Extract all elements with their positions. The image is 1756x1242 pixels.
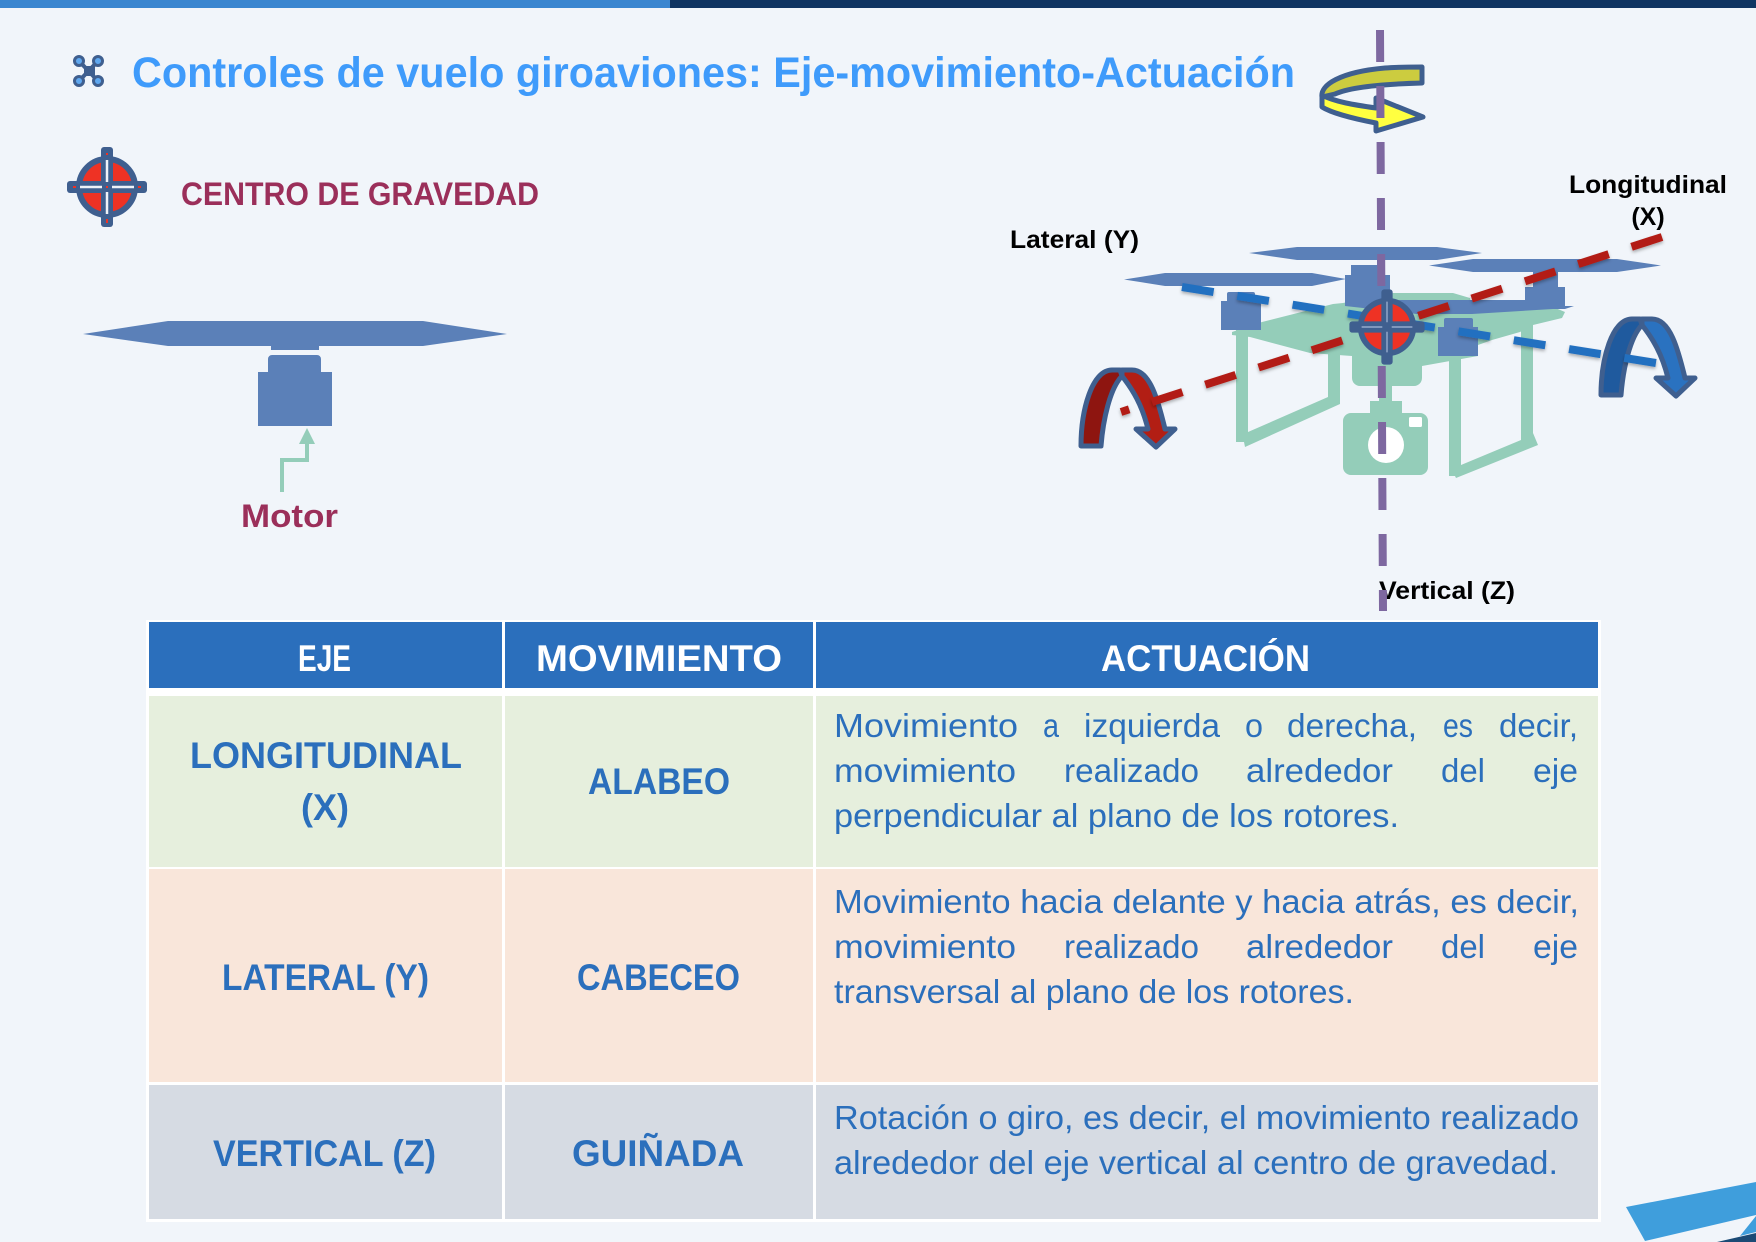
table header <box>149 622 1598 688</box>
icon: centro de gravedad <box>67 147 147 227</box>
yaw arrow <box>1322 67 1423 131</box>
row: longitudinal: Movimiento <box>834 707 1018 744</box>
drone body <box>1232 293 1565 475</box>
label: vertical: Vertical (Z) <box>1379 577 1515 605</box>
row: longitudinal <box>149 696 1598 867</box>
pitch arrow: blue <box>1601 319 1695 396</box>
motor body <box>258 355 332 426</box>
table header: MOVIMIENTO <box>536 638 782 679</box>
label: longitudinal: Longitudinal <box>1569 171 1727 199</box>
table header: ACTUACIÓN <box>1101 637 1310 679</box>
camera lens <box>1368 427 1404 463</box>
title: Controles de vuelo giroaviones: Eje-movimiento-Actuación <box>132 49 1295 97</box>
row: vertical: Rotación o giro, es decir, el movimiento realizado <box>834 1099 1579 1136</box>
row: lateral: del <box>1441 928 1485 965</box>
axis: longitudinal red dashed <box>1121 237 1662 412</box>
drone rotors, arm and rear motors <box>1124 247 1661 314</box>
axis: lateral blue dashed <box>1182 287 1656 363</box>
row: lateral: CABECEO <box>577 957 740 998</box>
row: longitudinal: realizado <box>1064 752 1199 789</box>
row: vertical: GUIÑADA <box>572 1132 744 1174</box>
row: lateral: eje <box>1533 928 1578 965</box>
row: vertical: VERTICAL (Z) <box>213 1133 436 1174</box>
label: longitudinal <box>1569 171 1727 231</box>
row: lateral <box>149 869 1598 1082</box>
row: lateral: realizado <box>1064 928 1199 965</box>
row: lateral: movimiento <box>834 928 1016 965</box>
row: longitudinal: LONGITUDINAL <box>190 735 462 776</box>
axis: vertical purple dashed <box>1380 30 1383 611</box>
row: longitudinal: ALABEO <box>588 761 730 802</box>
row: lateral: transversal al plano de los rotores. <box>834 973 1354 1010</box>
row: longitudinal: derecha, <box>1287 707 1417 744</box>
row: longitudinal: a <box>1043 707 1060 744</box>
corner decoration <box>1626 1182 1756 1242</box>
row: longitudinal: izquierda <box>1084 707 1221 744</box>
label: centro de gravedad: CENTRO DE GRAVEDAD <box>181 176 539 212</box>
rotor hub <box>271 346 319 350</box>
row: longitudinal: perpendicular al plano de los rotores. <box>834 797 1399 834</box>
front motors <box>1221 292 1478 356</box>
row: lateral: LATERAL (Y) <box>222 957 429 998</box>
row: longitudinal: del <box>1441 752 1485 789</box>
drone legs <box>1236 325 1538 478</box>
drone illustration <box>1124 247 1661 478</box>
table <box>146 620 1601 1222</box>
row: longitudinal: movimiento <box>834 752 1016 789</box>
row: longitudinal: eje <box>1533 752 1578 789</box>
icon: centro de gravedad on drone <box>1349 289 1425 365</box>
icon: drone <box>74 56 102 86</box>
row: lateral: Movimiento hacia delante y hacia atrás, es decir, <box>834 883 1579 920</box>
row: longitudinal: alrededor <box>1246 752 1393 789</box>
roll arrow: red <box>1081 370 1175 447</box>
label: motor: Motor <box>241 498 338 534</box>
motor diagram <box>83 321 507 426</box>
rotor blade <box>83 321 507 346</box>
row: longitudinal: (X) <box>301 787 349 828</box>
label: lateral: Lateral (Y) <box>1010 226 1139 254</box>
label: longitudinal: (X) <box>1631 203 1665 231</box>
camera flash <box>1409 417 1422 427</box>
row: vertical: alrededor del eje vertical al centro de gravedad. <box>834 1144 1558 1181</box>
row: longitudinal: decir, <box>1499 707 1578 744</box>
top bar <box>0 0 1756 8</box>
row: longitudinal: o <box>1245 707 1263 744</box>
row: vertical <box>149 1085 1598 1219</box>
row: longitudinal: es <box>1443 707 1473 744</box>
arrow to motor <box>282 428 315 492</box>
row: lateral: alrededor <box>1246 928 1393 965</box>
table header: EJE <box>298 638 351 679</box>
